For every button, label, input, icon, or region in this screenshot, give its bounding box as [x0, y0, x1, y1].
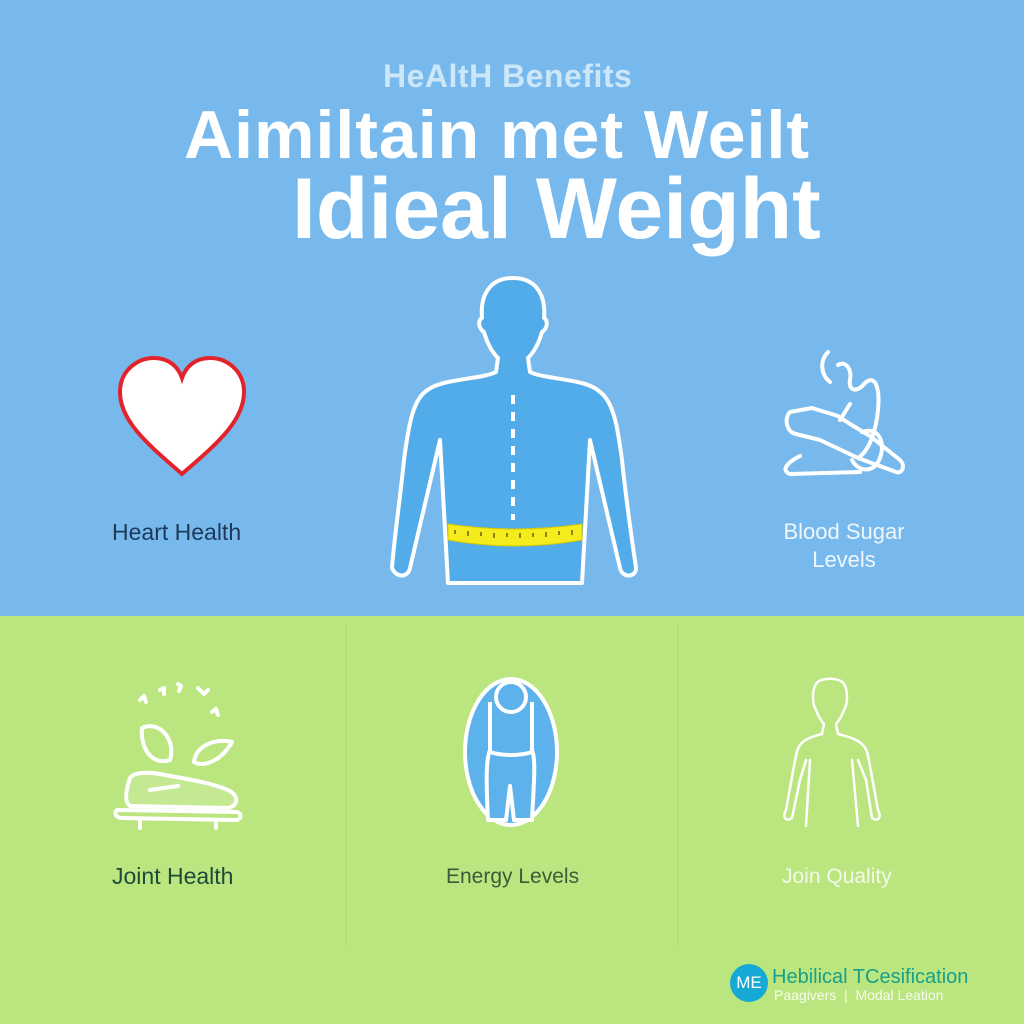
footer logo: Paagivers | Modal Leation: [774, 987, 943, 1003]
icon: heart: [118, 356, 246, 477]
icon: joint health (shoe & leaves): [113, 682, 242, 830]
logo badge: ME: [736, 973, 762, 992]
label: energy levels: Energy Levels: [446, 865, 579, 888]
title line 2: Idieal Weight: [292, 161, 821, 257]
subtitle: HeAltH Benefits: [383, 58, 632, 94]
title line 1: Aimiltain met Weilt: [184, 97, 810, 173]
central body figure: [390, 276, 638, 585]
label: heart health: Heart Health: [112, 519, 241, 545]
label: blood sugar levels: Blood Sugar Levels: [783, 519, 905, 572]
icon: person outline: [783, 678, 881, 828]
footer text: Hebilical TCesification: [772, 966, 968, 988]
label: join quality: Join Quality: [782, 865, 892, 888]
footer logo: [730, 964, 968, 1003]
icon: blood sugar (arm): [784, 350, 905, 476]
logo badge: [730, 964, 768, 1002]
icon: energy levels: [463, 677, 559, 827]
measuring tape: [448, 524, 582, 546]
label: joint health: Joint Health: [112, 863, 233, 889]
